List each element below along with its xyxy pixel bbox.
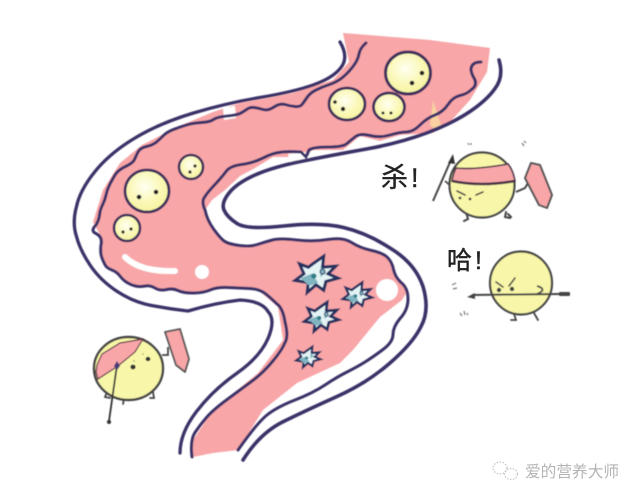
wavy inner wall upper xyxy=(93,43,366,457)
white highlight dot xyxy=(195,265,209,279)
warrior 3 body xyxy=(94,337,163,400)
germ middle xyxy=(304,302,339,331)
warrior 2 body xyxy=(490,252,552,314)
warrior 3 feet xyxy=(105,392,154,404)
warrior 1 face xyxy=(457,191,483,200)
cell large left xyxy=(125,170,169,212)
cream stain xyxy=(430,100,441,131)
warrior: spear through xyxy=(452,252,570,320)
warrior 1 sparks xyxy=(468,141,526,146)
white patch in lining xyxy=(223,106,236,120)
warrior 3 shield xyxy=(162,329,189,372)
warrior 1 shield xyxy=(516,163,552,208)
warrior: bandaged xyxy=(94,329,189,424)
warrior 2 sparks xyxy=(452,283,468,316)
cell top large xyxy=(386,52,430,94)
warrior 2 face xyxy=(496,278,515,291)
warrior 2 spear xyxy=(467,292,570,299)
warrior 1 headband lower line xyxy=(452,181,515,184)
watermark: brand xyxy=(493,462,619,481)
wavy inner wall lower xyxy=(203,62,481,450)
shout text: 杀: 杀! xyxy=(381,163,419,193)
cell top right xyxy=(374,93,404,121)
germ large xyxy=(295,256,338,292)
warrior 2 hand xyxy=(537,286,542,294)
white highlight streak xyxy=(125,257,175,271)
warrior 1 spear xyxy=(433,154,455,201)
cell top middle xyxy=(329,88,365,120)
cell small upper xyxy=(179,155,203,179)
warrior 2 feet xyxy=(511,313,538,320)
panel: intestine xyxy=(74,33,501,460)
warrior 1 body xyxy=(450,152,514,218)
outer wall upper left xyxy=(74,42,345,453)
warrior: headband with shield and spear xyxy=(433,141,552,221)
white highlight dot large xyxy=(376,279,398,301)
watermark text: 爱的营养大师 xyxy=(525,463,619,481)
germ right xyxy=(343,282,372,307)
outer wall right xyxy=(223,60,501,460)
shout text: 哈: 哈! xyxy=(447,247,482,275)
germ lower xyxy=(296,347,320,367)
warrior 3 face xyxy=(130,353,150,369)
warrior 3 bandage xyxy=(96,339,143,379)
warrior 1 feet xyxy=(464,212,511,221)
warrior 1 headband xyxy=(452,164,515,184)
warrior 3 spear xyxy=(107,361,120,424)
white gap near upper bend xyxy=(288,152,310,163)
cell small lower xyxy=(114,215,140,241)
icon: chat bubbles xyxy=(493,462,518,480)
intestine pink lining xyxy=(93,33,490,457)
